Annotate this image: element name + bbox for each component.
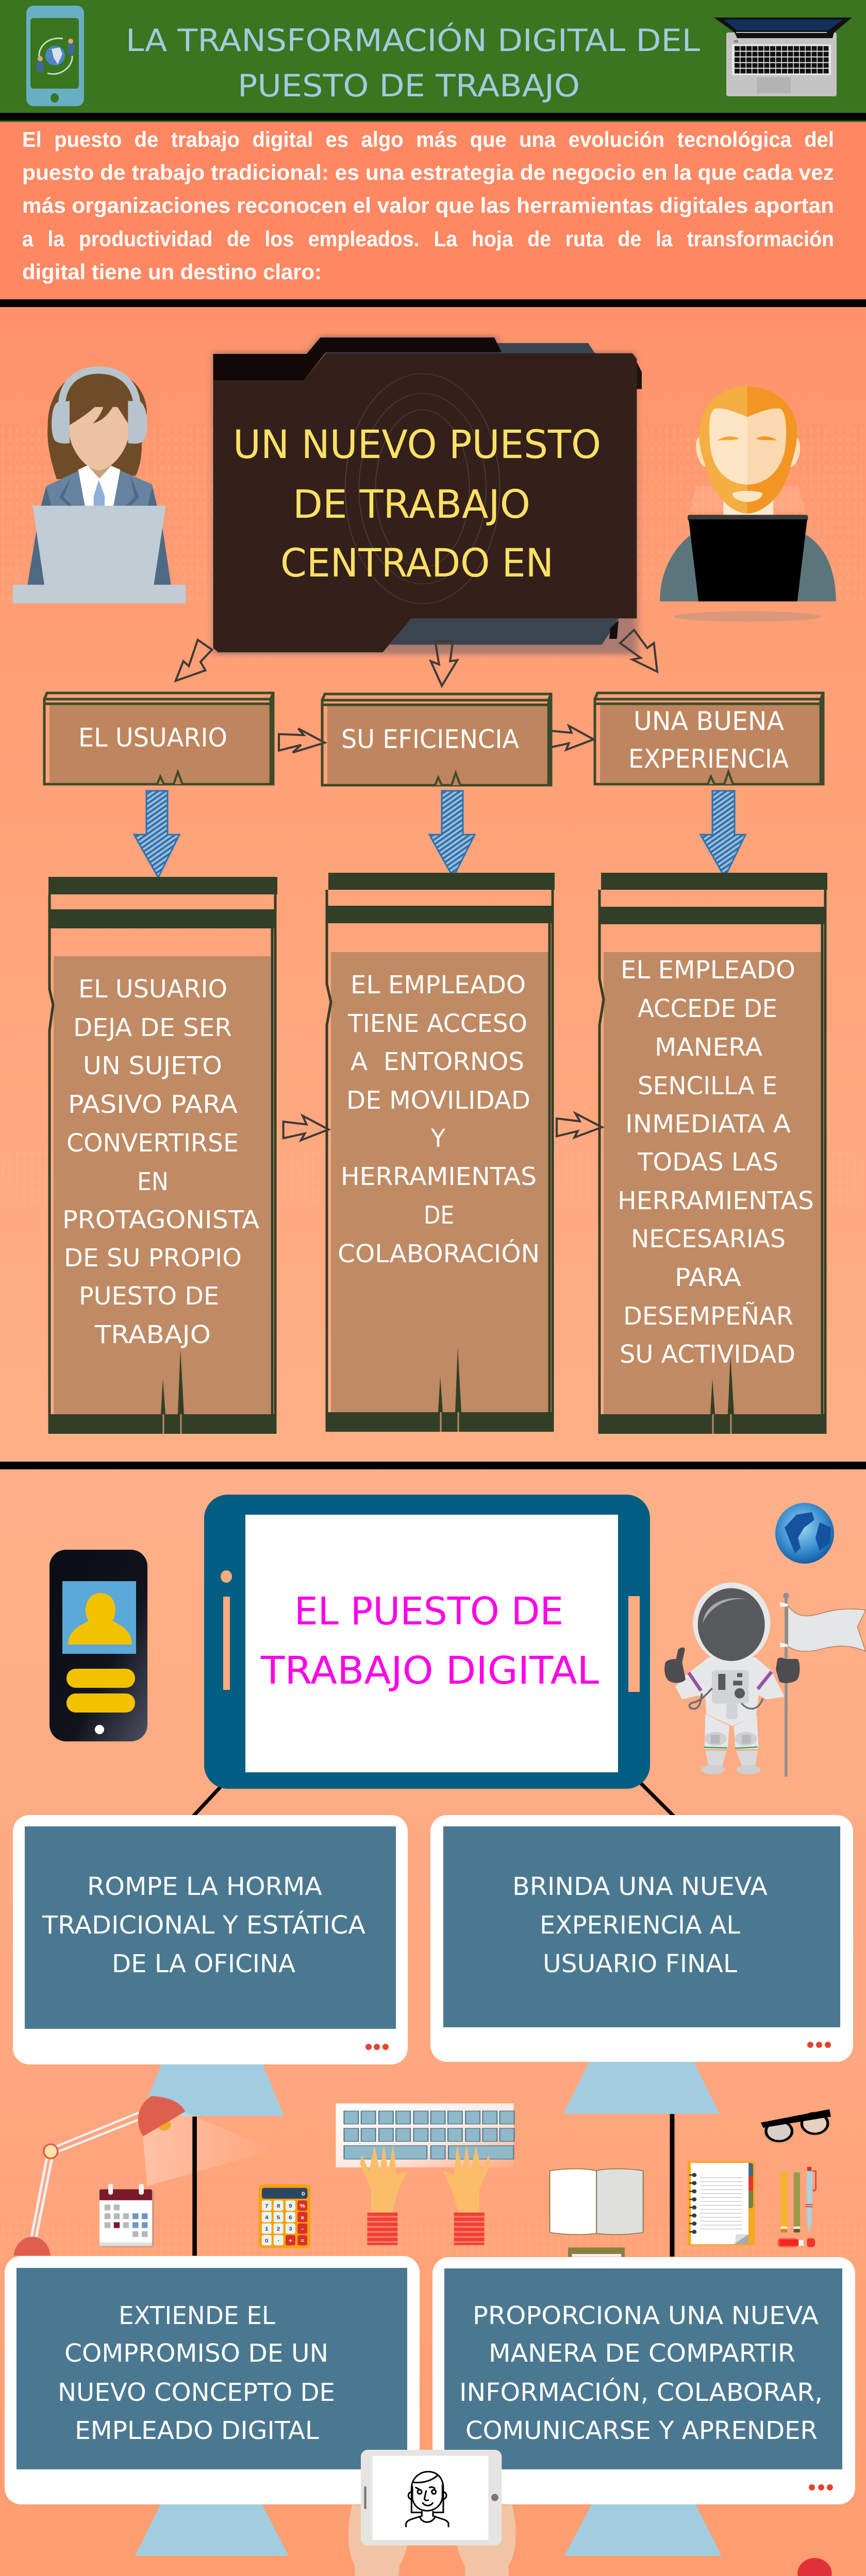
monitor: rompe la horma: TRADICIONAL Y ESTÁTICA	[42, 1910, 365, 1940]
tall box: el empleado tiene acceso: COLABORACIÓN	[338, 1239, 540, 1268]
icon: calculator: 0	[302, 2192, 305, 2197]
monitor: brinda una nueva experiencia: EXPERIENCIA AL	[540, 1911, 740, 1940]
icon: calculator: 8	[277, 2204, 280, 2209]
icon: calculator: 4	[265, 2215, 269, 2221]
title: PUESTO DE TRABAJO	[238, 68, 580, 104]
monitor: extiende el compromiso: EXTIENDE EL	[119, 2301, 275, 2330]
box: una buena experiencia: EXPERIENCIA	[628, 744, 789, 774]
icon: pencils and pen	[781, 2165, 816, 2233]
tall box: el empleado accede: PARA	[675, 1263, 741, 1292]
icon: calendar	[99, 2184, 154, 2247]
tall box: el empleado accede: SENCILLA E	[638, 1072, 777, 1100]
monitor: proporciona una nueva manera: COMUNICARSE Y APRENDER	[465, 2416, 818, 2445]
title	[126, 22, 701, 104]
icon: phone with globe	[26, 6, 84, 106]
arrows from folder to boxes	[176, 630, 657, 753]
tall box: el usuario: PASIVO PARA	[68, 1090, 238, 1119]
icon: astronaut with flag	[664, 1583, 865, 1776]
monitor: proporciona una nueva manera: PROPORCIONA UNA NUEVA	[473, 2301, 819, 2330]
tall box: el usuario: DE SU PROPIO	[64, 1244, 242, 1273]
intro text panel: a la productividad de los empleados. La hoja de ruta de la transformación	[22, 227, 834, 251]
tall box: el usuario: EN	[137, 1167, 169, 1196]
icon: keyboard and hands	[336, 2104, 514, 2245]
icon: calculator: x	[301, 2215, 305, 2221]
tall box: el empleado tiene acceso: EL EMPLEADO	[351, 971, 526, 999]
tall box: el usuario: TRABAJO	[94, 1320, 211, 1349]
tall box: el empleado tiene acceso	[326, 873, 555, 1432]
monitor: proporciona una nueva manera: INFORMACIÓN, COLABORAR,	[459, 2378, 823, 2407]
icon: calculator: -	[302, 2227, 304, 2232]
box: una buena experiencia	[595, 693, 823, 784]
monitor: proporciona una nueva manera	[432, 2257, 855, 2504]
intro text panel: puesto de trabajo tradicional: es una estrategia de negocio en la que cada vez	[22, 160, 834, 184]
icon: globe	[775, 1503, 834, 1564]
monitor: extiende el compromiso: EMPLEADO DIGITAL	[75, 2416, 319, 2445]
icon: calculator: %	[299, 2204, 305, 2209]
icon: calculator: +	[289, 2238, 293, 2244]
intro text panel: El puesto de trabajo digital es algo más que una evolución tecnológica del	[22, 127, 834, 151]
tall box: el empleado tiene acceso: Y	[430, 1124, 446, 1153]
tall box: el usuario: UN SUJETO	[83, 1052, 222, 1080]
icon: notebook	[688, 2161, 755, 2245]
icons: book, notebook, pencils, usb and glasses	[550, 2109, 831, 2257]
title: LA TRANSFORMACIÓN DIGITAL DEL	[126, 22, 701, 59]
tall box: el empleado accede: SU ACTIVIDAD	[620, 1340, 795, 1369]
box: el usuario	[44, 693, 273, 784]
tall box: el empleado accede: TODAS LAS	[637, 1148, 778, 1177]
monitor: rompe la horma: DE LA OFICINA	[112, 1950, 295, 1978]
heading: un nuevo puesto: DE TRABAJO	[293, 481, 530, 527]
arrows between tall boxes	[284, 1113, 602, 1140]
icon: usb drive	[777, 2238, 815, 2247]
monitor: brinda una nueva experiencia	[430, 1815, 853, 2062]
monitor stands top	[140, 2061, 720, 2116]
icon: calculator: =	[301, 2238, 305, 2244]
header banner	[0, 0, 866, 122]
heading: un nuevo puesto	[233, 421, 601, 586]
monitor: rompe la horma	[13, 1815, 408, 2064]
tall box: el empleado tiene acceso: HERRAMIENTAS	[341, 1162, 537, 1191]
box: su eficiencia	[322, 694, 551, 785]
blue hatched arrows	[134, 791, 745, 877]
icon: calculator: 6	[289, 2215, 292, 2221]
icon: calculator	[259, 2184, 310, 2248]
icon: calculator: ·	[277, 2238, 279, 2244]
tall box: el usuario: DEJA DE SER	[73, 1013, 232, 1042]
heading: un nuevo puesto: UN NUEVO PUESTO	[233, 421, 601, 467]
heading: el puesto de trabajo digital: EL PUESTO DE	[294, 1589, 563, 1634]
monitor: extiende el compromiso	[5, 2256, 420, 2504]
icon: calculator: 2	[277, 2227, 280, 2232]
icon: sun and cloud	[776, 2558, 832, 2576]
tall box: el empleado accede: DESEMPEÑAR	[623, 1302, 793, 1331]
monitor: brinda una nueva experiencia: BRINDA UNA NUEVA	[512, 1872, 768, 1901]
monitor: rompe la horma: ROMPE LA HORMA	[87, 1872, 322, 1901]
icon: bearded man with laptop	[660, 386, 836, 622]
monitor stands bottom	[135, 2503, 722, 2556]
tall box: el empleado tiene acceso: TIENE ACCESO	[347, 1009, 527, 1038]
icon: calculator: 3	[289, 2227, 292, 2232]
tall box: el empleado accede: EL EMPLEADO	[621, 956, 795, 985]
tall box: el empleado accede: ACCEDE DE	[638, 994, 777, 1023]
tall box: el usuario: EL USUARIO	[78, 975, 227, 1004]
icon: calculator: 1	[265, 2227, 269, 2232]
monitor: extiende el compromiso: COMPROMISO DE UN	[64, 2339, 328, 2368]
tall box: el usuario	[48, 877, 277, 1434]
tall box: el empleado accede: NECESARIAS	[631, 1225, 786, 1253]
monitor: brinda una nueva experiencia: USUARIO FINAL	[543, 1950, 737, 1978]
tall box: el usuario: CONVERTIRSE	[66, 1129, 239, 1158]
tall box: el empleado tiene acceso: DE MOVILIDAD	[346, 1086, 530, 1115]
icon: calculator: 7	[265, 2204, 269, 2209]
tall box: el empleado accede	[598, 873, 827, 1434]
tall box: el empleado accede: HERRAMIENTAS	[618, 1187, 814, 1215]
tall box: el usuario: PROTAGONISTA	[62, 1206, 259, 1234]
intro text panel: digital tiene un destino claro:	[22, 260, 322, 284]
folder with heading	[213, 336, 642, 655]
tall box: el empleado tiene acceso: A ENTORNOS	[351, 1047, 524, 1076]
tall box: el empleado accede: INMEDIATA A	[625, 1110, 791, 1139]
heading: un nuevo puesto: CENTRADO EN	[280, 540, 554, 586]
tablet held by hands	[341, 2450, 523, 2576]
tall box: el empleado tiene acceso: DE	[424, 1201, 454, 1230]
intro text panel	[0, 122, 866, 307]
monitor: proporciona una nueva manera: MANERA DE COMPARTIR	[489, 2339, 795, 2368]
intro text panel: más organizaciones reconocen el valor que las herramientas digitales aportan	[22, 193, 834, 217]
icon: woman portrait	[406, 2471, 448, 2527]
box: el usuario: EL USUARIO	[78, 723, 227, 753]
icon: smartphone with user	[49, 1550, 147, 1741]
box: una buena experiencia: UNA BUENA	[634, 706, 784, 736]
icon: glasses	[761, 2109, 831, 2144]
icons: lamp, calendar and calculator	[14, 2096, 310, 2256]
tall box: el empleado accede: MANERA	[655, 1033, 762, 1062]
tablet with main heading	[193, 1495, 674, 1816]
heading: el puesto de trabajo digital: TRABAJO DIGITAL	[260, 1649, 599, 1693]
tall box: el usuario: PUESTO DE	[79, 1282, 219, 1311]
icon: calculator: 0	[265, 2238, 269, 2244]
monitor: extiende el compromiso: NUEVO CONCEPTO DE	[58, 2378, 335, 2407]
heading: el puesto de trabajo digital	[260, 1589, 599, 1693]
icon: calculator: 5	[277, 2215, 280, 2221]
icon: calculator: 9	[289, 2204, 292, 2209]
box: su eficiencia: SU EFICIENCIA	[341, 724, 519, 754]
icon: woman with headset and laptop	[13, 369, 186, 603]
icon: book	[550, 2169, 643, 2257]
icon: laptop	[714, 18, 852, 96]
